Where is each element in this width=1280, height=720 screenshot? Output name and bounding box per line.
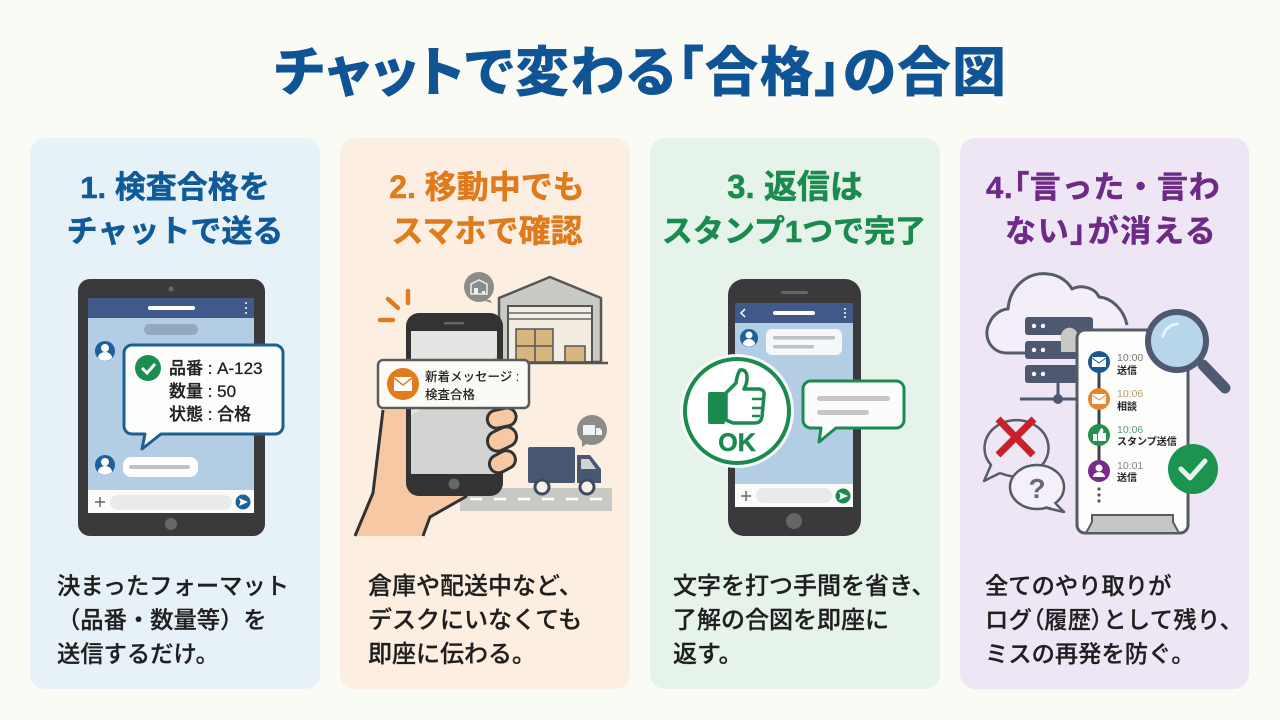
icon: magnifying glass (1148, 312, 1225, 388)
log entry stamp: スタンプ送信 (1117, 435, 1177, 448)
log entry 10:01: 送信 (1117, 471, 1137, 484)
icon: thumbs up OK stamp: OK (718, 429, 756, 457)
body text: step 4: ミスの再発を防ぐ。 (985, 641, 1195, 667)
body text: step 1: （品番・数量等）を (57, 607, 267, 633)
icon: speech bubble with question mark: ? (1028, 473, 1046, 504)
heading: step 4: ない」が消える (1005, 214, 1217, 249)
heading: step 2 (389, 169, 585, 249)
title: チャットで変わる「合格」の合図 (274, 43, 1006, 103)
body text: step 2: 倉庫や配送中など、 (368, 573, 583, 600)
illustration: chat log document (1077, 330, 1188, 533)
icon: speech bubble with red X (984, 419, 1048, 481)
panel: step 4 no more he-said-she-said (960, 138, 1249, 689)
panel: step 1 send inspection pass by chat (30, 138, 320, 689)
log entry stamp: 10:06 (1117, 424, 1143, 436)
heading: step 4: 4.「言った・言わ (986, 170, 1221, 205)
callout: new message notification: 新着メッセージ : (425, 369, 519, 384)
icon: speech bubble with question mark (1010, 465, 1064, 512)
icon: warehouse badge (464, 272, 494, 303)
body text: step 1 (57, 573, 289, 667)
icon: thumbs up OK stamp (680, 354, 794, 468)
illustration: phone with chat (728, 279, 861, 536)
body text: step 3: 返す。 (673, 641, 743, 668)
icon: alert ticks (380, 291, 408, 320)
log entry 10:00: 送信 (1117, 364, 1137, 377)
body text: step 1: 決まったフォーマット (57, 573, 289, 599)
heading: step 3: スタンプ1つで完了 (662, 214, 926, 249)
log entry 10:00 (1088, 351, 1143, 377)
log entry 10:01: 10:01 (1117, 460, 1143, 472)
log entry 10:01 (1088, 460, 1143, 484)
panel: step 3 reply with one stamp (650, 138, 940, 689)
body text: step 3: 文字を打つ手間を省き、 (673, 573, 935, 600)
log entry 10:06: 10:06 (1117, 388, 1143, 400)
icon: truck badge (577, 415, 607, 447)
body text: step 1: 送信するだけ。 (57, 641, 219, 667)
log entry 10:06 (1088, 388, 1143, 413)
illustration: warehouse (499, 277, 608, 363)
heading: step 4 (986, 170, 1221, 249)
heading: step 1: チャットで送る (67, 214, 283, 249)
heading: step 3: 3. 返信は (727, 168, 863, 205)
callout: inspection message: 品番 : A-123 (169, 359, 263, 378)
illustration: cloud and server (987, 274, 1127, 404)
body text: step 3: 了解の合図を即座に (673, 607, 889, 634)
callout: inspection message: 数量 : 50 (169, 382, 236, 401)
heading: step 3 (662, 168, 926, 249)
heading: step 2: スマホで確認 (391, 213, 583, 249)
body text: step 4: 全てのやり取りが (985, 573, 1171, 599)
log entry stamp (1088, 424, 1177, 448)
body text: step 4: ログ（履歴）として残り、 (985, 607, 1243, 633)
callout: reply bubble (803, 381, 904, 442)
log entry 10:06: 相談 (1117, 400, 1137, 413)
illustration: tablet with chat (78, 279, 283, 536)
icon: green check (1168, 444, 1218, 494)
log entry 10:00: 10:00 (1117, 352, 1143, 364)
illustration: road and truck (460, 447, 612, 511)
heading: step 1 (67, 170, 283, 249)
panel: step 2 check on smartphone while moving (340, 138, 630, 689)
heading: step 2: 2. 移動中でも (389, 169, 585, 205)
body text: step 4 (985, 573, 1243, 667)
body text: step 2: デスクにいなくても (368, 606, 582, 634)
callout: new message notification (378, 360, 529, 408)
heading: step 1: 1. 検査合格を (80, 170, 270, 205)
callout: inspection message: 状態 : 合格 (169, 405, 251, 424)
callout: new message notification: 検査合格 (425, 387, 476, 402)
illustration: hand holding phone (355, 313, 520, 536)
body text: step 2: 即座に伝わる。 (368, 641, 536, 668)
body text: step 3 (673, 573, 935, 668)
body text: step 2 (368, 573, 583, 668)
callout: inspection message (124, 345, 283, 449)
